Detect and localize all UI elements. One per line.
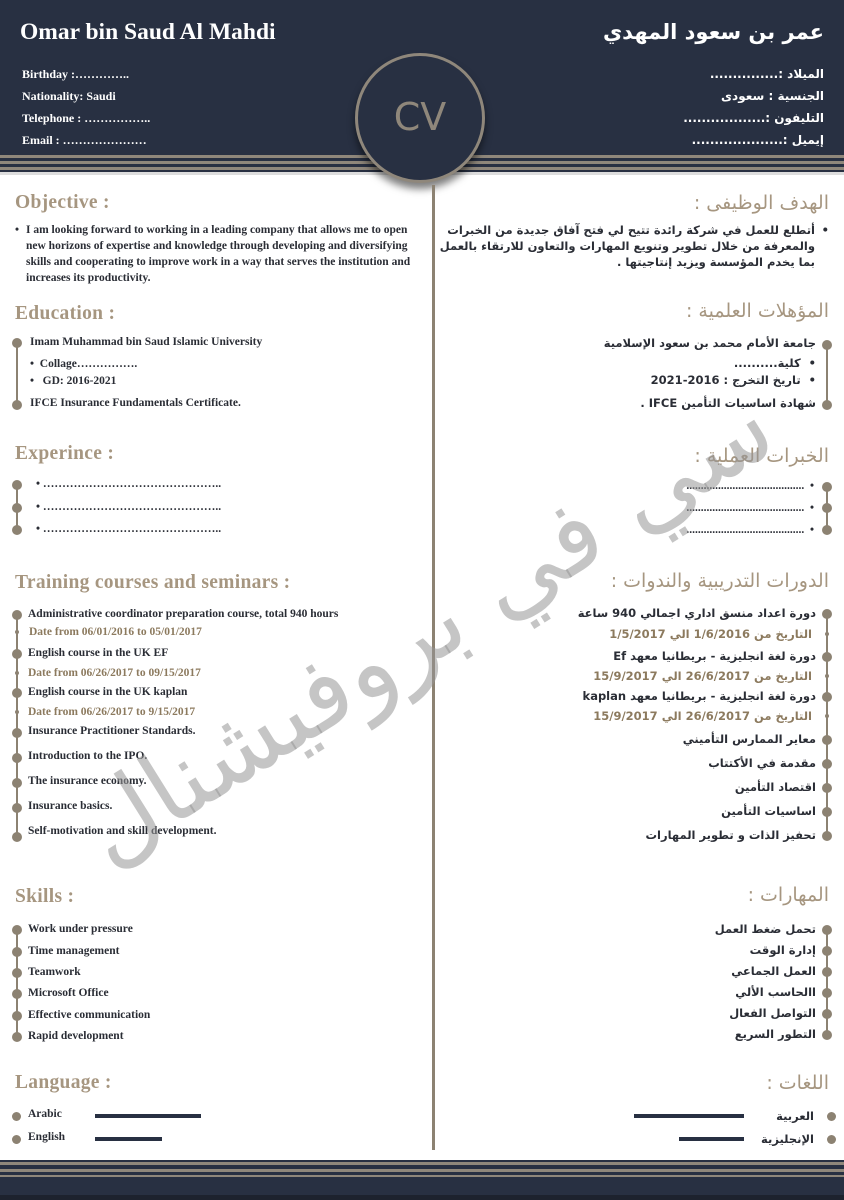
experience AR: ......................................... •: [686, 502, 814, 514]
objective EN: [15, 192, 410, 284]
personal info english: Birthday :…………..: [22, 67, 129, 81]
experience EN: [12, 443, 221, 535]
skills AR: تحمل ضغط العمل: [715, 922, 816, 936]
skills AR: المهارات :: [748, 884, 829, 906]
personal info arabic: [683, 67, 824, 147]
center divider: [432, 185, 435, 1150]
objective AR: الهدف الوظيفى :: [694, 192, 829, 214]
training AR: معاير الممارس التأميني: [683, 732, 816, 746]
training AR: التاريخ من 1/6/2016 الي 1/5/2017: [609, 627, 812, 641]
training EN: Date from 06/01/2016 to 05/01/2017: [29, 626, 202, 638]
skills EN: Rapid development: [28, 1030, 124, 1042]
training EN: Self-motivation and skill development.: [28, 825, 216, 837]
experience EN: • ………………………………………..: [36, 478, 221, 490]
training AR: اساسيات التأمين: [721, 804, 816, 818]
experience EN: • ………………………………………..: [36, 501, 221, 513]
personal info arabic: الميلاد :...............: [710, 67, 824, 81]
education AR: جامعة الأمام محمد بن سعود الإسلامية: [604, 336, 816, 350]
education EN: [12, 303, 262, 410]
personal info english: [22, 67, 150, 147]
education EN: Education :: [15, 303, 115, 324]
education AR: المؤهلات العلمية :: [686, 300, 829, 322]
skills AR: التواصل الفعال: [729, 1006, 816, 1020]
training AR: دورة اعداد منسق اداري اجمالي 940 ساعة: [578, 606, 816, 620]
education AR: • تاريخ التخرج : 2016-2021: [651, 373, 816, 387]
skills AR: العمل الجماعي: [731, 964, 816, 978]
language AR: [634, 1072, 836, 1146]
objective EN: I am looking forward to working in a leading company that allows me to open new horizons of expertise and knowledge through developing and diversifying skills and cooperating to improve work in a way that serves the institution and increases its productivity.: [26, 224, 410, 284]
personal info arabic: إيميل :....................: [692, 133, 824, 147]
skills EN: Time management: [28, 945, 119, 957]
training AR: [578, 570, 832, 842]
training EN: Administrative coordinator preparation course, total 940 hours: [28, 608, 338, 620]
language EN: Arabic: [28, 1108, 62, 1120]
personal info english: Email : …………………: [22, 133, 147, 147]
name arabic: عمر بن سعود المهدي: [603, 20, 824, 44]
personal info english: Nationality: Saudi: [22, 89, 116, 103]
skills EN: Effective communication: [28, 1009, 150, 1021]
objective EN: •: [15, 224, 19, 236]
header band: [0, 0, 844, 175]
watermark: سي في بروفيشنال: [58, 368, 793, 887]
skills AR: [715, 884, 832, 1041]
objective AR: •: [822, 223, 829, 237]
training AR: التاريخ من 26/6/2017 الي 15/9/2017: [593, 709, 812, 723]
education EN: • Collage…………….: [30, 358, 137, 370]
training AR: تحفيز الذات و تطوير المهارات: [646, 828, 816, 842]
education EN: Imam Muhammad bin Saud Islamic University: [30, 336, 262, 348]
language EN: English: [28, 1131, 65, 1143]
training EN: English course in the UK EF: [28, 647, 168, 659]
personal info arabic: الجنسية : سعودى: [721, 89, 824, 103]
personal info english: Telephone : ……………..: [22, 111, 150, 125]
education AR: شهادة اساسيات التأمين IFCE .: [640, 396, 816, 410]
skills EN: Work under pressure: [28, 923, 133, 935]
training AR: مقدمة في الأكتتاب: [708, 756, 816, 770]
experience AR: ......................................... •: [686, 480, 814, 492]
CV circle: CV: [394, 95, 446, 139]
education EN: IFCE Insurance Fundamentals Certificate.: [30, 397, 241, 409]
training AR: الدورات التدريبية والندوات :: [611, 570, 829, 592]
skills AR: إدارة الوقت: [750, 943, 816, 957]
language AR: اللغات :: [766, 1072, 829, 1094]
skills EN: Teamwork: [28, 966, 81, 978]
objective AR: [440, 192, 829, 269]
training EN: [12, 572, 338, 842]
personal info arabic: التليفون :..................: [683, 111, 824, 125]
objective EN: Objective :: [15, 192, 110, 213]
skills AR: التطور السريع: [735, 1027, 816, 1041]
language AR: الإنجليزية: [761, 1132, 814, 1146]
training AR: دورة لغة انجليزية - بريطانيا معهد kaplan: [583, 689, 816, 703]
experience EN: • ………………………………………..: [36, 523, 221, 535]
CV circle: [355, 53, 485, 183]
training EN: Training courses and seminars :: [15, 572, 290, 593]
skills EN: [12, 886, 150, 1042]
training AR: دورة لغة انجليزية - بريطانيا معهد Ef: [613, 649, 816, 663]
training EN: Insurance basics.: [28, 800, 112, 812]
training AR: اقتصاد التأمين: [735, 780, 816, 794]
education EN: • GD: 2016-2021: [30, 375, 116, 387]
language EN: [12, 1072, 201, 1144]
training EN: The insurance economy.: [28, 775, 147, 787]
experience EN: Experince :: [15, 443, 114, 464]
language EN: Language :: [15, 1072, 112, 1093]
language AR: العربية: [776, 1109, 814, 1123]
training EN: Date from 06/26/2017 to 9/15/2017: [28, 706, 195, 718]
skills AR: االحاسب الألي: [735, 985, 816, 999]
training AR: التاريخ من 26/6/2017 الي 15/9/2017: [593, 669, 812, 683]
experience AR: [686, 445, 832, 536]
experience AR: الخبرات العملية :: [694, 445, 829, 467]
training EN: English course in the UK kaplan: [28, 686, 187, 698]
skills EN: Skills :: [15, 886, 74, 907]
education AR: [604, 300, 832, 410]
footer band: [0, 1160, 844, 1200]
training EN: Introduction to the IPO.: [28, 750, 147, 762]
skills EN: Microsoft Office: [28, 987, 109, 999]
education AR: • كلية..........: [734, 356, 816, 370]
name english: Omar bin Saud Al Mahdi: [20, 19, 276, 45]
training EN: Date from 06/26/2017 to 09/15/2017: [28, 667, 201, 679]
objective AR: أتطلع للعمل في شركة رائدة تتيح لي فتح آفاق جديدة من الخبرات والمعرفة من خلال تطوير وتنويع المهارات والتعاون للارتقاء بالعمل بما يخدم المؤسسة ويزيد إنتاجيتها .: [440, 223, 815, 269]
experience AR: ......................................... •: [686, 524, 814, 536]
training EN: Insurance Practitioner Standards.: [28, 725, 196, 737]
